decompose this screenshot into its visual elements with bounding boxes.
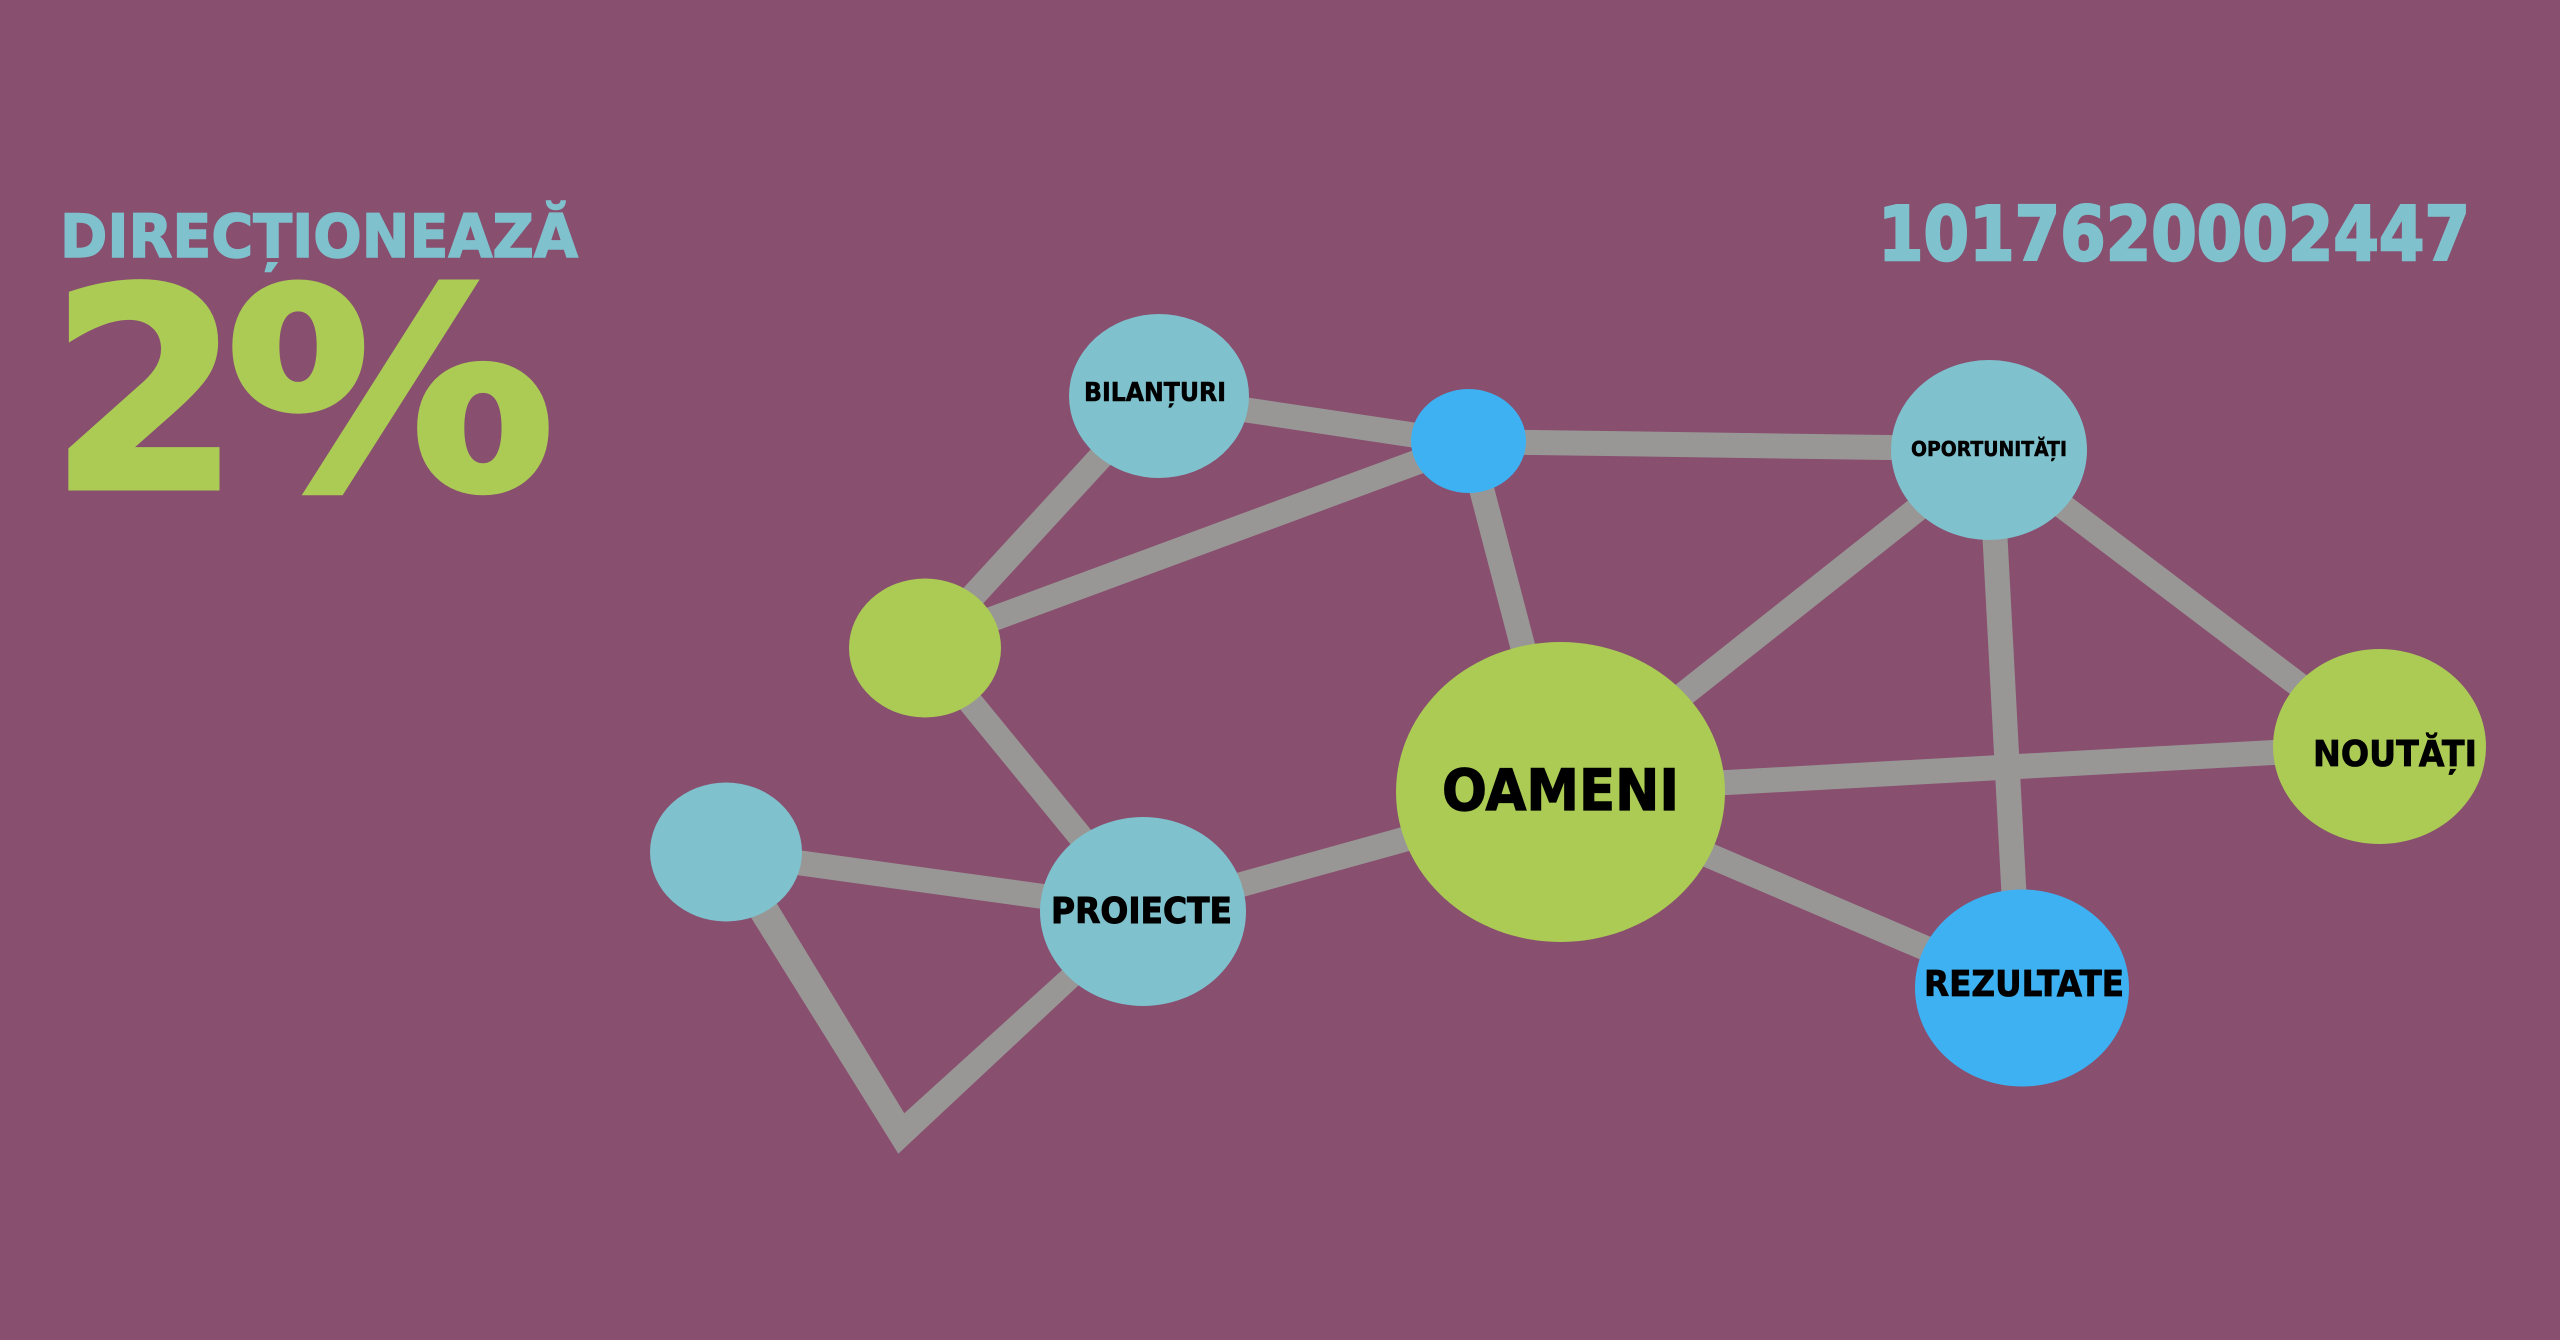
- node: small green: [849, 578, 1001, 718]
- big figure: 2%: %: [226, 172, 555, 568]
- node: small blue: [1411, 389, 1526, 493]
- connector: blue node to green node: [960, 450, 1450, 631]
- connector: teal node via lower vertex to proiecte: [732, 887, 1090, 1154]
- connector: oameni to oportunități: [1660, 507, 1920, 713]
- heading: direcționează: DIRECȚIONEAZĂ: [60, 200, 579, 272]
- connector: blue node to oameni: [1469, 441, 1532, 680]
- node: rezultate: [1915, 890, 2129, 1086]
- node: noutăți: NOUTĂȚI: [2313, 732, 2477, 775]
- connector: green node to proiecte: [931, 654, 1111, 874]
- connector: oameni to rezultate: [1680, 843, 1960, 963]
- tax identification number: 1017620002447: [1878, 190, 2470, 278]
- big figure: 2%: [49, 172, 555, 568]
- node: oportunități: OPORTUNITĂȚI: [1911, 437, 2067, 461]
- connector: green node to bilanțuri: [940, 436, 1120, 632]
- node: small teal: [650, 782, 802, 922]
- connector: blue node to oportunități: [1500, 442, 1920, 448]
- connector: oportunități to noutăți: [2040, 489, 2320, 701]
- connector: bilanțuri to blue node: [1240, 409, 1420, 436]
- network connectors: [732, 409, 2320, 1154]
- node: oportunități: [1891, 360, 2087, 540]
- node: bilanțuri: [1069, 314, 1249, 478]
- node: proiecte: [1040, 817, 1246, 1006]
- connector: oportunități to rezultate: [1993, 500, 2017, 950]
- connector: teal node to proiecte: [750, 856, 1090, 903]
- node: bilanțuri: BILANȚURI: [1084, 378, 1226, 408]
- node: oameni: [1396, 642, 1725, 942]
- node: noutăți: [2273, 649, 2486, 844]
- connector: proiecte to oameni: [1200, 835, 1420, 896]
- node: rezultate: REZULTATE: [1924, 964, 2124, 1005]
- node: proiecte: PROIECTE: [1051, 891, 1232, 932]
- big figure: 2%: 2: [49, 230, 241, 554]
- node: oameni: OAMENI: [1442, 758, 1679, 824]
- connector: oameni to noutăți: [1700, 751, 2300, 784]
